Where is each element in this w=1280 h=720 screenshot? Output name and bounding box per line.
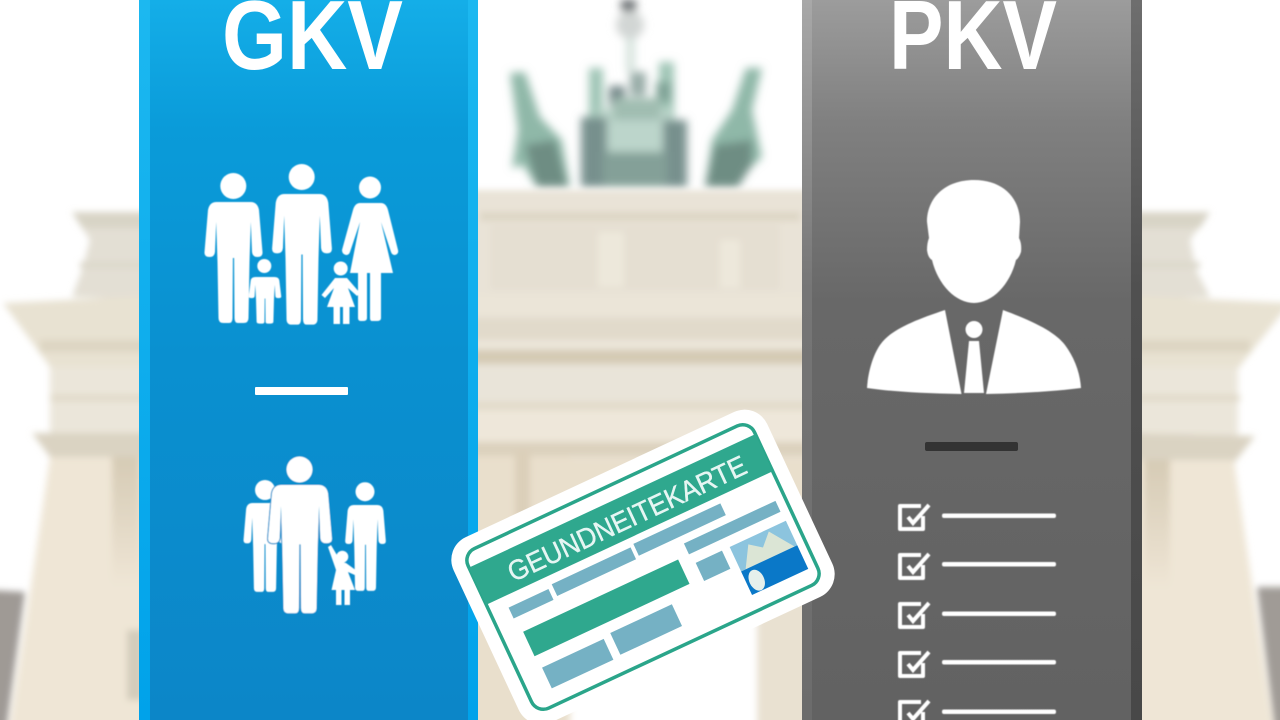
checklist row 3 — [900, 603, 1056, 627]
card header band — [469, 434, 773, 605]
card photo — [730, 521, 808, 595]
health insurance card — [443, 401, 843, 720]
panel: GKV — [139, 0, 478, 720]
checklist row 2 — [900, 554, 1056, 578]
icon: family of four — [244, 456, 386, 613]
divider — [925, 442, 1018, 451]
checklist row 1 — [900, 505, 1056, 529]
card green field — [523, 559, 690, 656]
checklist row 4 — [900, 652, 1056, 676]
divider — [255, 387, 348, 395]
quadriga statue — [510, 0, 762, 187]
checklist row 5 — [900, 701, 1056, 720]
icon: businessman — [867, 180, 1081, 394]
checklist — [900, 505, 1056, 720]
card title: GEUNDNEITEKARTE — [503, 450, 751, 588]
panel: PKV — [802, 0, 1142, 720]
gate architecture — [0, 190, 1280, 720]
icon: family of five — [204, 164, 398, 325]
card data fields — [506, 482, 807, 691]
